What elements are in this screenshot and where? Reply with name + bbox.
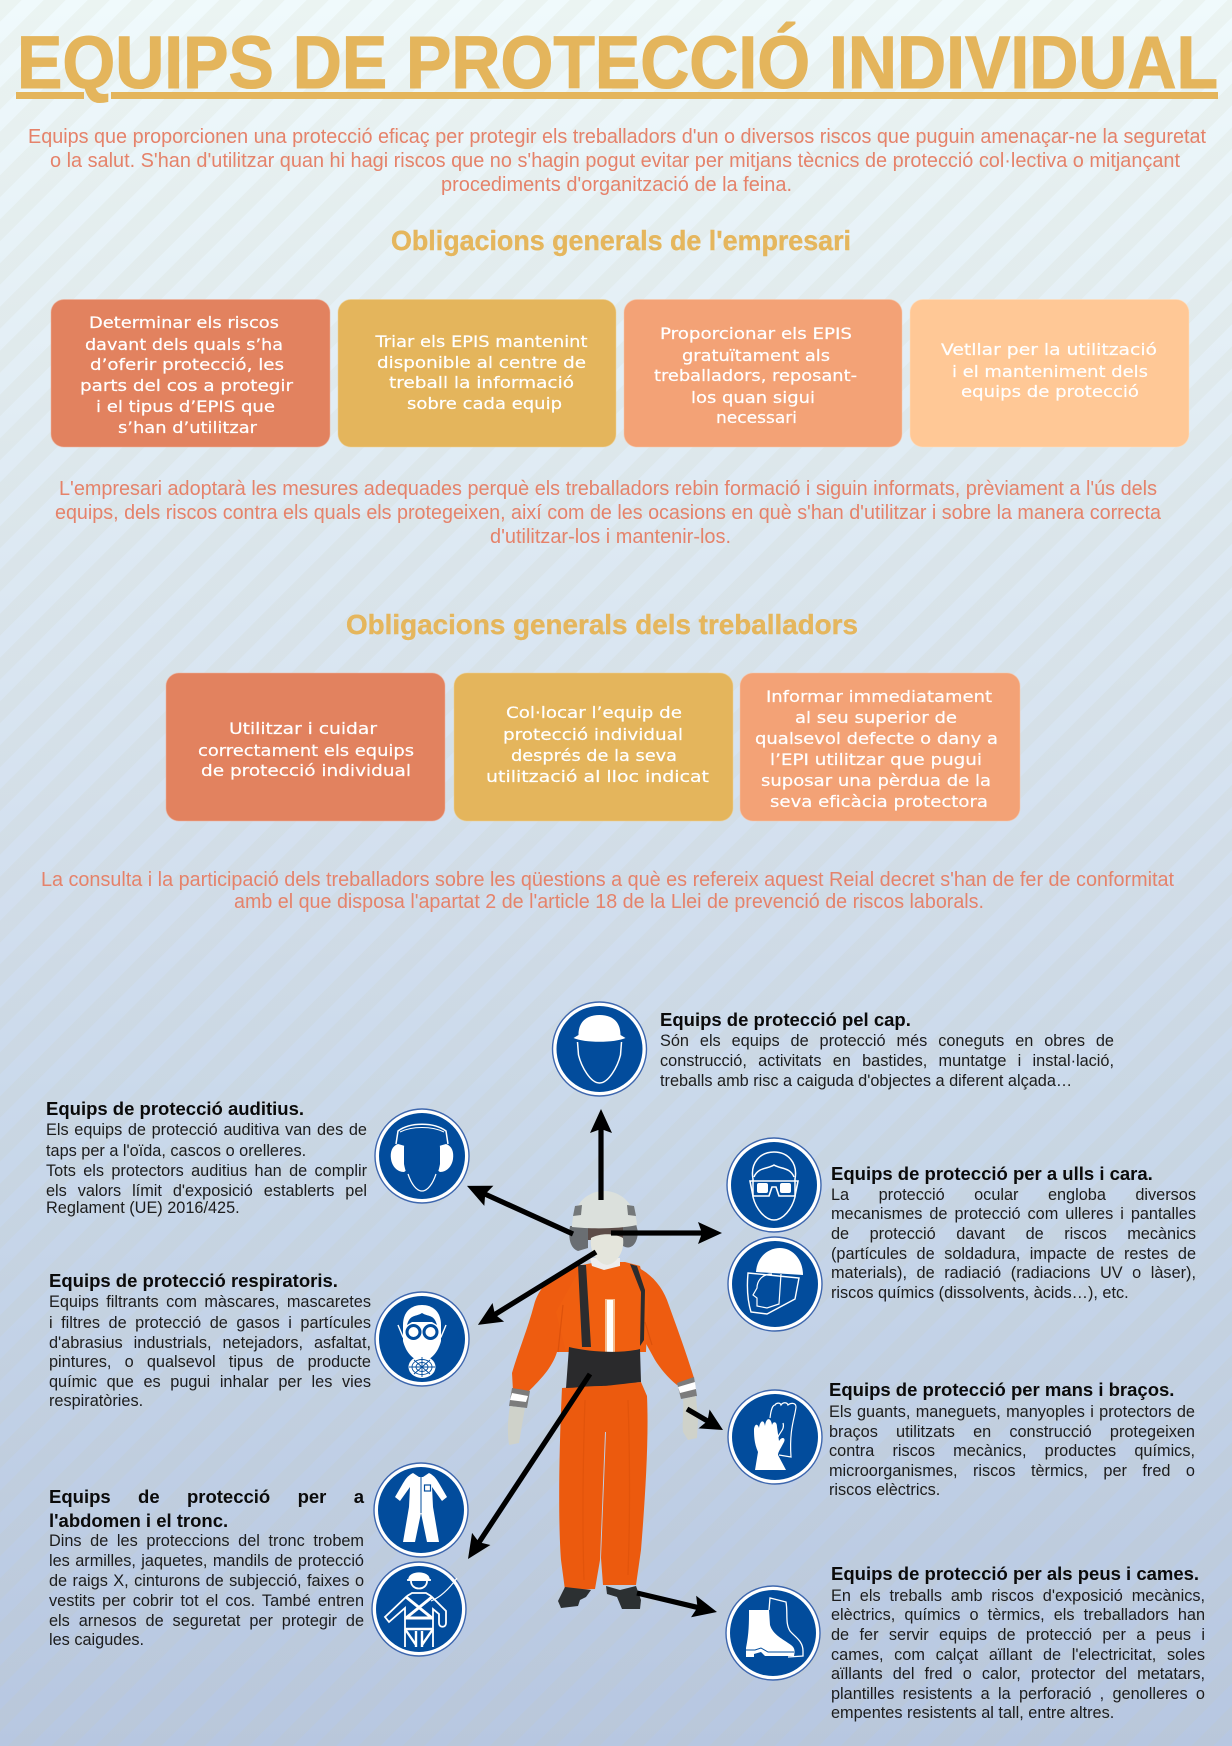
card: determine risks: parts del cos a protegir	[80, 376, 293, 395]
text block: hand and arm protection: Equips de protecció per mans i braços.	[829, 1379, 1174, 1400]
text block: abdomen and trunk protection: Dins de les proteccions del tronc trobem	[49, 1532, 364, 1550]
text block: abdomen and trunk protection: vestits per cobrir tot el cos. També entren	[49, 1592, 364, 1610]
text block: foot and leg protection: En els treballs amb riscos d'exposició mecànics,	[831, 1587, 1205, 1605]
text block: hand and arm protection: contra riscos mecànics, productes químics,	[829, 1442, 1195, 1460]
card: provide PPE: Proporcionar els EPIS	[660, 324, 852, 343]
card: store after use: protecció individual	[503, 725, 683, 744]
text block: eye and face protection	[831, 1163, 1196, 1302]
card: maintain PPE	[910, 300, 1189, 447]
icon: hearing protection ear muffs	[375, 1109, 469, 1203]
employer training paragraph	[55, 478, 1162, 548]
text block: abdomen and trunk protection: els arnesos de seguretat per protegir de	[49, 1612, 364, 1630]
figure suspenders	[578, 1264, 645, 1347]
employer obligation cards	[51, 300, 1189, 447]
text block: head protection: construcció, activitats en bastides, muntatge i instal·lació,	[660, 1052, 1114, 1070]
card: provide PPE: treballadors, reposant-	[654, 366, 857, 385]
text block: respiratory protection: Equips de protecció respiratoris.	[49, 1270, 338, 1291]
text block: eye and face protection: de protecció davant de riscos mecànics	[831, 1225, 1196, 1243]
text block: hearing protection: Equips de protecció auditius.	[46, 1098, 304, 1119]
card: provide PPE	[624, 300, 902, 447]
arrow to hearing icon	[462, 1176, 578, 1244]
card: determine risks	[51, 300, 330, 447]
text block: hand and arm protection: microorganismes, riscos tèrmics, per fred o	[829, 1462, 1195, 1480]
card: report defects: seva eficàcia protectora	[770, 792, 988, 811]
employer training paragraph: equips, dels riscos contra els quals els protegeixen, així com de les ocasions en què s'han d'utilitzar i sobre la manera correcta	[55, 502, 1162, 524]
card: determine risks: s’han d’utilitzar	[118, 418, 257, 437]
text block: foot and leg protection: empentes resistents al tall, entre altres.	[831, 1704, 1114, 1722]
text block: respiratory protection: pintures, o qualsevol tipus de producte	[49, 1353, 371, 1371]
figure: worker in orange coverall with full protective equipment	[508, 1191, 698, 1609]
card: provide PPE: los quan sigui	[691, 388, 815, 407]
text block: abdomen and trunk protection: de raigs X, cinturons de subjecció, faixes o	[49, 1572, 364, 1590]
text block: foot and leg protection: de fer servir equips de protecció per a peus i	[831, 1626, 1205, 1644]
card: store after use	[454, 673, 733, 821]
text block: hand and arm protection	[829, 1379, 1195, 1499]
text block: respiratory protection: Equips filtrants com màscares, mascaretes	[49, 1293, 371, 1311]
text block: foot and leg protection: elèctrics, químics o tèrmics, els treballadors han	[831, 1606, 1205, 1624]
card: maintain PPE: equips de protecció	[961, 382, 1139, 401]
figure torso	[556, 1262, 648, 1352]
text block: respiratory protection: químic que es pugui inhalar per les vies	[49, 1373, 371, 1391]
text block: head protection: treballs amb risc a caiguda d'objectes a diferent alçada…	[660, 1072, 1072, 1090]
icon: protective gloves	[728, 1390, 822, 1484]
text block: hand and arm protection: braços utilitzats en construcció protegeixen	[829, 1423, 1195, 1441]
text block: abdomen and trunk protection: les armilles, jaquetes, mandils de protecció	[49, 1552, 364, 1570]
figure belt	[566, 1347, 641, 1388]
figure head: collar, mask, ear muffs, helmet	[590, 1258, 620, 1270]
text block: hand and arm protection: riscos elèctrics.	[829, 1481, 940, 1499]
text block: head protection	[660, 1009, 1114, 1090]
card: report defects: qualsevol defecte o dany a	[755, 729, 998, 748]
card: determine risks: i el tipus d’EPIS que	[96, 397, 275, 416]
text block: foot and leg protection: cames, com calçat aïllant de l'electricitat, soles	[831, 1646, 1205, 1664]
text block: hand and arm protection: Els guants, maneguets, manyoples i protectors de	[829, 1403, 1195, 1421]
card: report defects: al seu superior de	[795, 708, 957, 727]
text block: hearing protection: Els equips de protecció auditiva van des de	[46, 1121, 367, 1139]
card: choose PPE: Triar els EPIS mantenint	[374, 332, 588, 351]
employer training paragraph: d'utilitzar-los i mantenir-los.	[490, 526, 731, 548]
text block: abdomen and trunk protection: l'abdomen i el tronc.	[49, 1510, 228, 1531]
consultation paragraph	[41, 869, 1174, 913]
text block: foot and leg protection: plantilles resistents a la perforació , genolleres o	[831, 1685, 1205, 1703]
text block: abdomen and trunk protection: Equips de protecció per a	[49, 1486, 364, 1507]
card: choose PPE: sobre cada equip	[407, 394, 562, 413]
text block: eye and face protection: La protecció ocular engloba diversos	[831, 1186, 1196, 1204]
card: determine risks: d’oferir protecció, les	[90, 355, 284, 374]
text block: respiratory protection: d'abrasius industrials, netejadors, asfaltat,	[49, 1334, 371, 1352]
text block: hearing protection: Reglament (UE) 2016/425.	[46, 1199, 240, 1217]
text block: hearing protection: taps per a l'oïda, cascos o orelleres.	[46, 1142, 306, 1160]
icon: safety boots	[726, 1586, 820, 1680]
card: choose PPE	[338, 300, 616, 447]
card: report defects: suposar una pèrdua de la	[761, 771, 991, 790]
icon: safety harness	[372, 1562, 466, 1656]
card: use and care: Utilitzar i cuidar	[229, 719, 377, 738]
icon: head protection helmet	[552, 1002, 646, 1096]
arrow to foot icon	[634, 1582, 720, 1623]
card: choose PPE: disponible al centre de	[377, 353, 586, 372]
arrow to trunk icons	[459, 1368, 599, 1565]
text block: respiratory protection	[49, 1270, 371, 1410]
card: use and care	[166, 673, 445, 821]
figure arms	[512, 1265, 582, 1391]
intro paragraph	[28, 126, 1206, 196]
text block: hearing protection: Tots els protectors auditius han de complir	[46, 1162, 367, 1180]
intro paragraph: procediments d'organització de la feina.	[441, 174, 792, 196]
text block: eye and face protection: riscos químics (dissolvents, àcids…), etc.	[831, 1284, 1129, 1302]
arrow to eye and face icons	[611, 1222, 722, 1244]
employer training paragraph: L'empresari adoptarà les mesures adequades perquè els treballadors rebin formació i siguin informats, prèviament a l'ús dels	[59, 478, 1157, 500]
text block: hearing protection	[46, 1098, 367, 1217]
arrow to hand icon	[681, 1400, 729, 1440]
heading: worker obligations: Obligacions generals dels treballadors	[346, 609, 858, 640]
card: store after use: Col·locar l’equip de	[506, 703, 682, 722]
text block: eye and face protection: (partícules de soldadura, impacte de restes de	[831, 1245, 1196, 1263]
card: maintain PPE: Vetllar per la utilització	[941, 340, 1157, 359]
figure legs	[559, 1382, 648, 1590]
card: report defects: Informar immediatament	[766, 687, 992, 706]
card: maintain PPE: i el manteniment dels	[952, 362, 1148, 381]
text block: head protection: Són els equips de protecció més coneguts en obres de	[660, 1032, 1114, 1050]
figure reflective strip	[605, 1299, 615, 1354]
figure cuffs and gloves	[509, 1388, 530, 1408]
card: choose PPE: treball la informació	[389, 373, 574, 392]
card: store after use: utilització al lloc indicat	[486, 767, 709, 786]
arrow to respiratory icon	[472, 1243, 602, 1334]
text block: hearing protection: els valors límit d'exposició establerts pel	[46, 1182, 367, 1200]
text block: head protection: Equips de protecció pel cap.	[660, 1009, 911, 1030]
text block: foot and leg protection: Equips de protecció per als peus i cames.	[831, 1563, 1199, 1584]
card: determine risks: Determinar els riscos	[89, 313, 279, 332]
card: use and care: correctament els equips	[198, 741, 414, 760]
icon: face shield	[728, 1237, 822, 1331]
card: determine risks: davant dels quals s’ha	[85, 335, 283, 354]
card: use and care: de protecció individual	[201, 761, 411, 780]
text block: eye and face protection: materials), de radiació (radiacions UV o làser),	[831, 1264, 1196, 1282]
card: provide PPE: gratuïtament als	[682, 346, 830, 365]
text block: respiratory protection: respiratòries.	[49, 1392, 143, 1410]
card: provide PPE: necessari	[716, 408, 797, 427]
icon: respiratory mask	[375, 1292, 469, 1386]
consultation paragraph: La consulta i la participació dels treballadors sobre les qüestions a què es refereix aquest Reial decret s'han de fer de conformitat	[41, 869, 1174, 891]
text block: eye and face protection: mecanismes de protecció com ulleres i pantalles	[831, 1205, 1196, 1223]
intro paragraph: Equips que proporcionen una protecció eficaç per protegir els treballadors d'un o diversos riscos que puguin amenaçar-ne la seguretat	[28, 126, 1206, 148]
card: report defects: l’EPI utilitzar que pugui	[770, 750, 982, 769]
text block: eye and face protection: Equips de protecció per a ulls i cara.	[831, 1163, 1153, 1184]
consultation paragraph: amb el que disposa l'apartat 2 de l'article 18 de la Llei de prevenció de riscos laborals.	[234, 891, 984, 913]
heading: employer obligations: Obligacions generals de l'empresari	[391, 225, 851, 256]
text block: foot and leg protection	[831, 1563, 1205, 1722]
text block: foot and leg protection: aïllants del fred o calor, protector del metatars,	[831, 1665, 1205, 1683]
figure shoes	[558, 1586, 641, 1609]
intro paragraph: o la salut. S'han d'utilitzar quan hi hagi riscos que no s'hagin pogut evitar per mitjans tècnics de protecció col·lectiva o mitjançant	[50, 150, 1180, 172]
text block: abdomen and trunk protection: les caigudes.	[49, 1631, 144, 1649]
text block: abdomen and trunk protection	[49, 1486, 364, 1649]
worker obligation cards	[166, 673, 1020, 821]
card: report defects	[740, 673, 1020, 821]
icon: protective coverall suit	[374, 1463, 468, 1557]
icon: eye protection goggles	[727, 1138, 821, 1232]
text block: respiratory protection: i filtres de protecció de gasos i partícules	[49, 1314, 371, 1332]
card: store after use: després de la seva	[511, 746, 677, 765]
arrow to head icon	[590, 1109, 612, 1200]
